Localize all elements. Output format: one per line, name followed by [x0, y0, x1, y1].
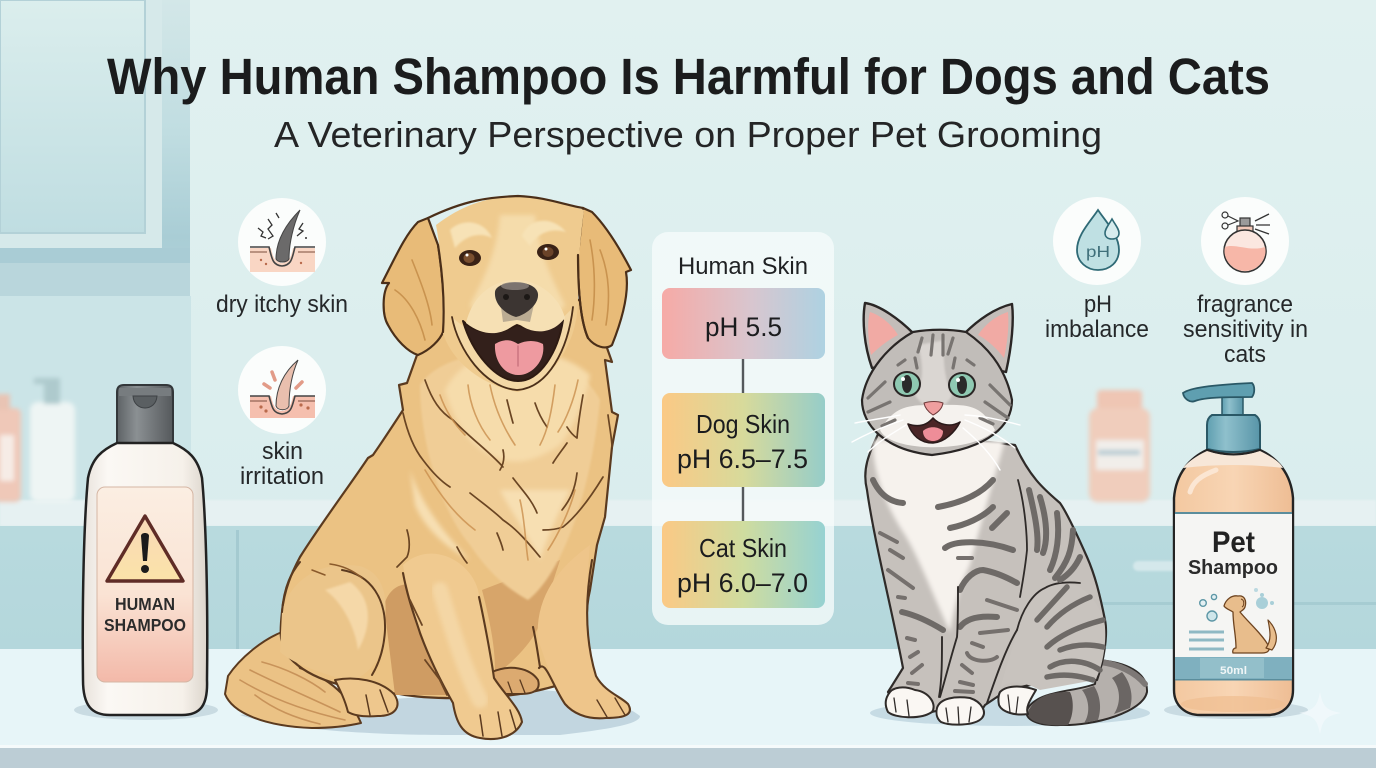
label: skin irritation: irritation [240, 463, 324, 490]
dog nose [495, 282, 538, 317]
dog mouth [463, 320, 563, 381]
icon: skin irritation [238, 346, 326, 434]
cat white chest [873, 440, 1005, 632]
dog muzzle [466, 280, 565, 333]
dog chest fur [397, 350, 612, 600]
bottle cap [117, 385, 173, 444]
human shampoo bottle [74, 385, 218, 720]
pump [1183, 383, 1260, 452]
warning triangle [107, 516, 183, 581]
dog hind leg shadow [384, 584, 490, 695]
heading: human skin: Human Skin [678, 253, 808, 280]
cat thigh stripes [1037, 587, 1103, 680]
dog rear small paw [492, 668, 539, 694]
bottle body [83, 443, 207, 715]
cat body [865, 430, 1106, 718]
50ml band: 50ml [1220, 665, 1247, 677]
icon: dry itchy skin [238, 198, 326, 286]
dog eyes [459, 250, 481, 266]
dog body [281, 300, 618, 698]
cat paws [886, 687, 934, 717]
bottle text [104, 594, 186, 635]
dog hind foot [335, 679, 397, 716]
cat mouth [908, 418, 960, 443]
dog shadow [240, 690, 640, 735]
background bottles, blurred [0, 378, 1150, 502]
title: Why Human Shampoo Is Harmful for Dogs and Cats [107, 48, 1270, 105]
icon: fragrance spray [1201, 197, 1289, 285]
label: pH imbalance: imbalance [1045, 316, 1149, 343]
cat ph box: pH 6.0–7.0 [677, 568, 808, 598]
human ph box: pH 5.5 [705, 312, 782, 342]
cat ph box: Cat Skin [699, 533, 787, 563]
bottle label [97, 487, 193, 682]
sparkle [1299, 692, 1341, 734]
cat head [852, 303, 1020, 470]
label text: Pet [1212, 526, 1255, 559]
cat eyes [894, 372, 920, 396]
label: skin irritation: skin [262, 438, 303, 465]
dog ears [382, 218, 444, 355]
label: fragrance sensitivity in cats: cats [1224, 341, 1266, 368]
dog tail [225, 632, 361, 728]
label: fragrance sensitivity in cats [1183, 291, 1308, 368]
cat whiskers [852, 415, 1020, 470]
cat front legs outlines [939, 587, 1017, 703]
cat forehead stripes [868, 335, 1010, 426]
label: dry itchy skin: dry itchy skin [216, 291, 348, 318]
pet bottle label [1175, 513, 1292, 657]
bottle text: SHAMPOO [104, 615, 186, 635]
icon: pH drop [1053, 197, 1141, 285]
cat thigh [1000, 582, 1105, 690]
pet shampoo bottle: Shampoo [1188, 557, 1278, 579]
cat [852, 303, 1150, 726]
dog face [436, 196, 584, 392]
dog lower jaw [452, 307, 573, 390]
dog left front leg [403, 554, 522, 739]
cat tail [1027, 660, 1147, 725]
bottle text: HUMAN [115, 594, 175, 614]
cat back stripes [1029, 490, 1080, 580]
dog belly shadow [482, 560, 560, 675]
dog ph box: Dog Skin [696, 409, 790, 439]
pet bottle body [1174, 450, 1293, 715]
dog tongue [495, 340, 543, 375]
label: skin irritation [240, 438, 324, 490]
pet shampoo bottle [1164, 383, 1308, 719]
cat ears [864, 303, 913, 368]
dog fur strands [397, 380, 612, 567]
label: pH imbalance: pH [1084, 291, 1112, 318]
dog right front leg [533, 545, 630, 718]
cat chest and leg stripes [873, 480, 1017, 630]
cat nose [924, 402, 943, 415]
50ml band [1175, 657, 1292, 680]
dog ph box: pH 6.5–7.5 [677, 444, 808, 474]
label: fragrance sensitivity in cats: fragrance [1197, 291, 1293, 318]
subtitle: A Veterinary Perspective on Proper Pet Grooming [274, 114, 1102, 155]
icon: pH drop: pH [1086, 244, 1110, 261]
connector lines [742, 359, 744, 521]
dog head [382, 196, 631, 392]
pH comparison panel [652, 232, 834, 625]
dog [225, 196, 640, 739]
label: pH imbalance [1045, 291, 1149, 343]
label dog and bubbles [1189, 588, 1276, 653]
cat face [862, 330, 1012, 455]
label: fragrance sensitivity in cats: sensitivity in [1183, 316, 1308, 343]
dog thigh [280, 565, 386, 682]
dog ph box [662, 393, 825, 487]
human ph box [662, 288, 825, 359]
cat ph box [662, 521, 825, 608]
